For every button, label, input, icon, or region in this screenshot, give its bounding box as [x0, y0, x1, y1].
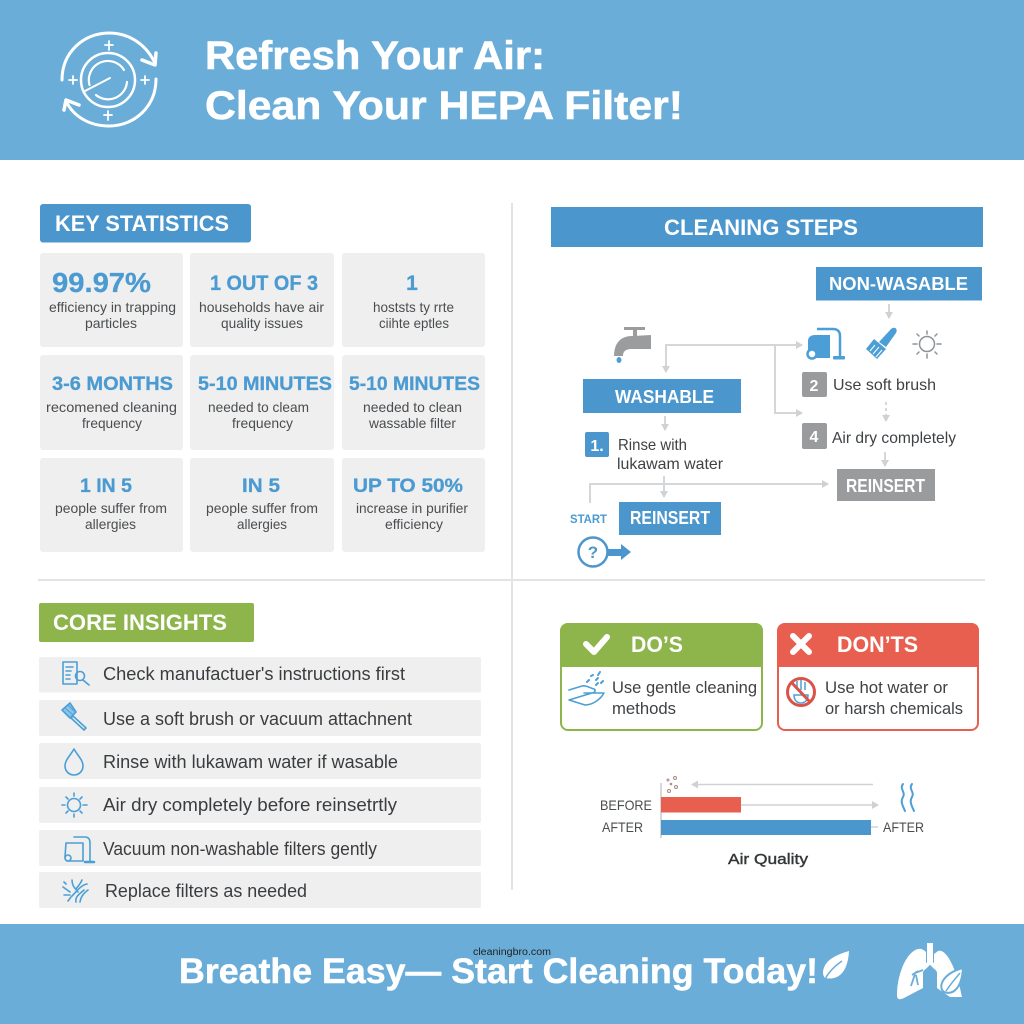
stat card: 5-10 minutes washable: wassable filter: [368, 415, 456, 431]
stat card: up to 50%: [342, 458, 485, 552]
stat card: 1 out of 3: [190, 253, 334, 347]
stat card: 5-10 minutes frequency: [190, 355, 334, 450]
stat card: 5-10 minutes washable: 5-10 MINUTES: [349, 374, 480, 395]
step 4: air dry: 4: [810, 429, 819, 446]
footer banner: [0, 924, 1024, 1024]
stat card: 1 in 5: 1 IN 5: [80, 476, 132, 497]
stat card: 3-6 months: 3-6 MONTHS: [52, 374, 173, 395]
stat card: in 5: IN 5: [242, 476, 280, 497]
bar: before: [661, 797, 741, 812]
step 4: air dry: [802, 423, 956, 449]
chart labels: AFTER: [883, 819, 924, 835]
reinsert: washable: REINSERT: [630, 508, 710, 528]
stat card: 99.97%: efficiency in trapping: [49, 299, 176, 315]
do's text: Use gentle cleaning: [612, 678, 757, 697]
step 1: rinse: lukawam water: [617, 456, 724, 473]
panel: don'ts: [777, 623, 979, 730]
do's heading: DO’S: [631, 632, 683, 657]
bar: after: [661, 820, 871, 835]
reinsert: non-washable: [837, 469, 935, 501]
branch: washable: [583, 379, 741, 413]
chart title: Air Quality: [728, 851, 809, 868]
stat card: 99.97%: particles: [85, 315, 137, 331]
chart labels: AFTER: [602, 819, 643, 835]
panel: core insights: [39, 603, 481, 908]
stat card: 5-10 minutes frequency: needed to cleam: [208, 399, 309, 415]
stat card: 5-10 minutes frequency: 5-10 MINUTES: [198, 374, 332, 395]
insight: replace filters: [39, 872, 481, 908]
step 1: rinse: Rinse with: [618, 437, 687, 454]
flow connectors: [590, 304, 889, 503]
title: Refresh Your Air:: [205, 34, 545, 78]
title: [205, 34, 683, 128]
heading: cleaning steps: CLEANING STEPS: [664, 215, 858, 240]
step 2: soft brush: [802, 372, 936, 397]
don'ts text: Use hot water or: [825, 678, 948, 697]
stat card: 1 out of 3: households have air: [199, 299, 324, 315]
stat card: 5-10 minutes washable: needed to clean: [363, 399, 462, 415]
insight: soft brush: [39, 700, 481, 736]
icon: start question arrow: ?: [588, 543, 598, 562]
icon: particles: [667, 776, 678, 792]
stat card: 1 in 5: people suffer from: [55, 500, 167, 516]
branch: non-washable: [816, 267, 982, 300]
don'ts text: [825, 678, 963, 718]
stat card: 1 in 5: allergies: [85, 516, 136, 532]
step 2: soft brush: 2: [810, 378, 819, 395]
do's text: [612, 678, 757, 718]
icon: air refresh cycle: [62, 33, 156, 126]
don'ts heading: DON’TS: [837, 632, 918, 657]
stat card: 1: ciihte eptles: [379, 315, 449, 331]
icon: hand with droplets: [569, 672, 604, 705]
stat card: in 5: people suffer from: [206, 500, 318, 516]
icon: lungs with leaf: [897, 943, 963, 999]
header banner: [0, 0, 1024, 160]
insight: replace filters: Replace filters as needed: [105, 881, 307, 901]
stat card: 1: hoststs ty rrte: [373, 299, 454, 315]
chart: air quality before and after: [600, 776, 924, 868]
icon: x mark: [793, 636, 809, 652]
heading: cleaning steps: [551, 207, 983, 247]
icon: clean air waves: [902, 784, 914, 811]
icon: faucet: [614, 327, 651, 363]
insight: check instructions: [39, 657, 481, 692]
insight: air dry: Air dry completely before reinsetrtly: [103, 795, 397, 815]
stat card: in 5: [190, 458, 334, 552]
don'ts text: or harsh chemicals: [825, 699, 963, 718]
panel: cleaning steps: [551, 207, 983, 566]
reinsert: washable: [619, 502, 721, 535]
step 4: air dry: Air dry completely: [832, 430, 956, 447]
panel: key statistics: [40, 204, 485, 552]
icon: brush: [866, 328, 897, 359]
stat card: up to 50%: increase in purifier: [356, 500, 468, 516]
icon: no hot water: [788, 678, 814, 706]
stat card: 5-10 minutes frequency: frequency: [232, 415, 293, 431]
step 1: rinse: [585, 432, 724, 473]
stat card: 99.97%: [40, 253, 183, 347]
step 2: soft brush: Use soft brush: [833, 377, 936, 394]
insight: rinse: [39, 743, 481, 779]
icon: sun: [913, 331, 941, 358]
heading: key statistics: KEY STATISTICS: [55, 211, 229, 236]
stat card: 3-6 months: recomened cleaning: [46, 399, 177, 415]
stat card: 1 in 5: [40, 458, 183, 552]
chart arrows: [692, 784, 878, 827]
do's text: methods: [612, 699, 676, 718]
stat card: 1 out of 3: 1 OUT OF 3: [210, 272, 318, 295]
stat card: 3-6 months: frequency: [82, 415, 142, 431]
start label: START: [570, 514, 607, 526]
website credit: cleaningbro.com: [473, 947, 551, 958]
insight: vacuum: [39, 830, 481, 866]
branch: non-washable: NON-WASABLE: [829, 274, 968, 294]
branch: washable: WASHABLE: [615, 387, 714, 407]
heading: core insights: [39, 603, 254, 642]
stat card: 1 out of 3: quality issues: [221, 315, 303, 331]
insight: check instructions: Check manufactuer's instructions first: [103, 664, 405, 684]
stat card: 1: [342, 253, 485, 347]
heading: key statistics: [40, 204, 251, 242]
insight: vacuum: Vacuum non-washable filters gently: [103, 839, 377, 859]
icon: start question arrow: [578, 538, 631, 566]
footer call to action: Breathe Easy— Start Cleaning Today!: [179, 952, 818, 991]
panel: do's: [560, 623, 763, 730]
icon: vacuum: [808, 329, 845, 360]
stat card: 99.97%: 99.97%: [52, 267, 151, 298]
icon: leaf: [823, 951, 849, 979]
reinsert: non-washable: REINSERT: [846, 476, 925, 496]
heading: core insights: CORE INSIGHTS: [53, 610, 227, 635]
step 1: rinse: 1.: [590, 438, 604, 455]
stat card: 1: 1: [406, 272, 418, 295]
title: Clean Your HEPA Filter!: [205, 84, 683, 128]
stat card: up to 50%: efficiency: [385, 516, 443, 532]
insight: rinse: Rinse with lukawam water if wasable: [103, 752, 398, 772]
insight: air dry: [39, 787, 481, 823]
stat card: 3-6 months: [40, 355, 183, 450]
insight: soft brush: Use a soft brush or vacuum attachnent: [103, 709, 412, 729]
chart labels: BEFORE: [600, 797, 652, 813]
chart labels: [600, 797, 924, 835]
stat card: 5-10 minutes washable: [342, 355, 485, 450]
icon: check mark: [586, 637, 607, 652]
stat card: up to 50%: UP TO 50%: [353, 476, 463, 497]
stat card: in 5: allergies: [237, 516, 287, 532]
